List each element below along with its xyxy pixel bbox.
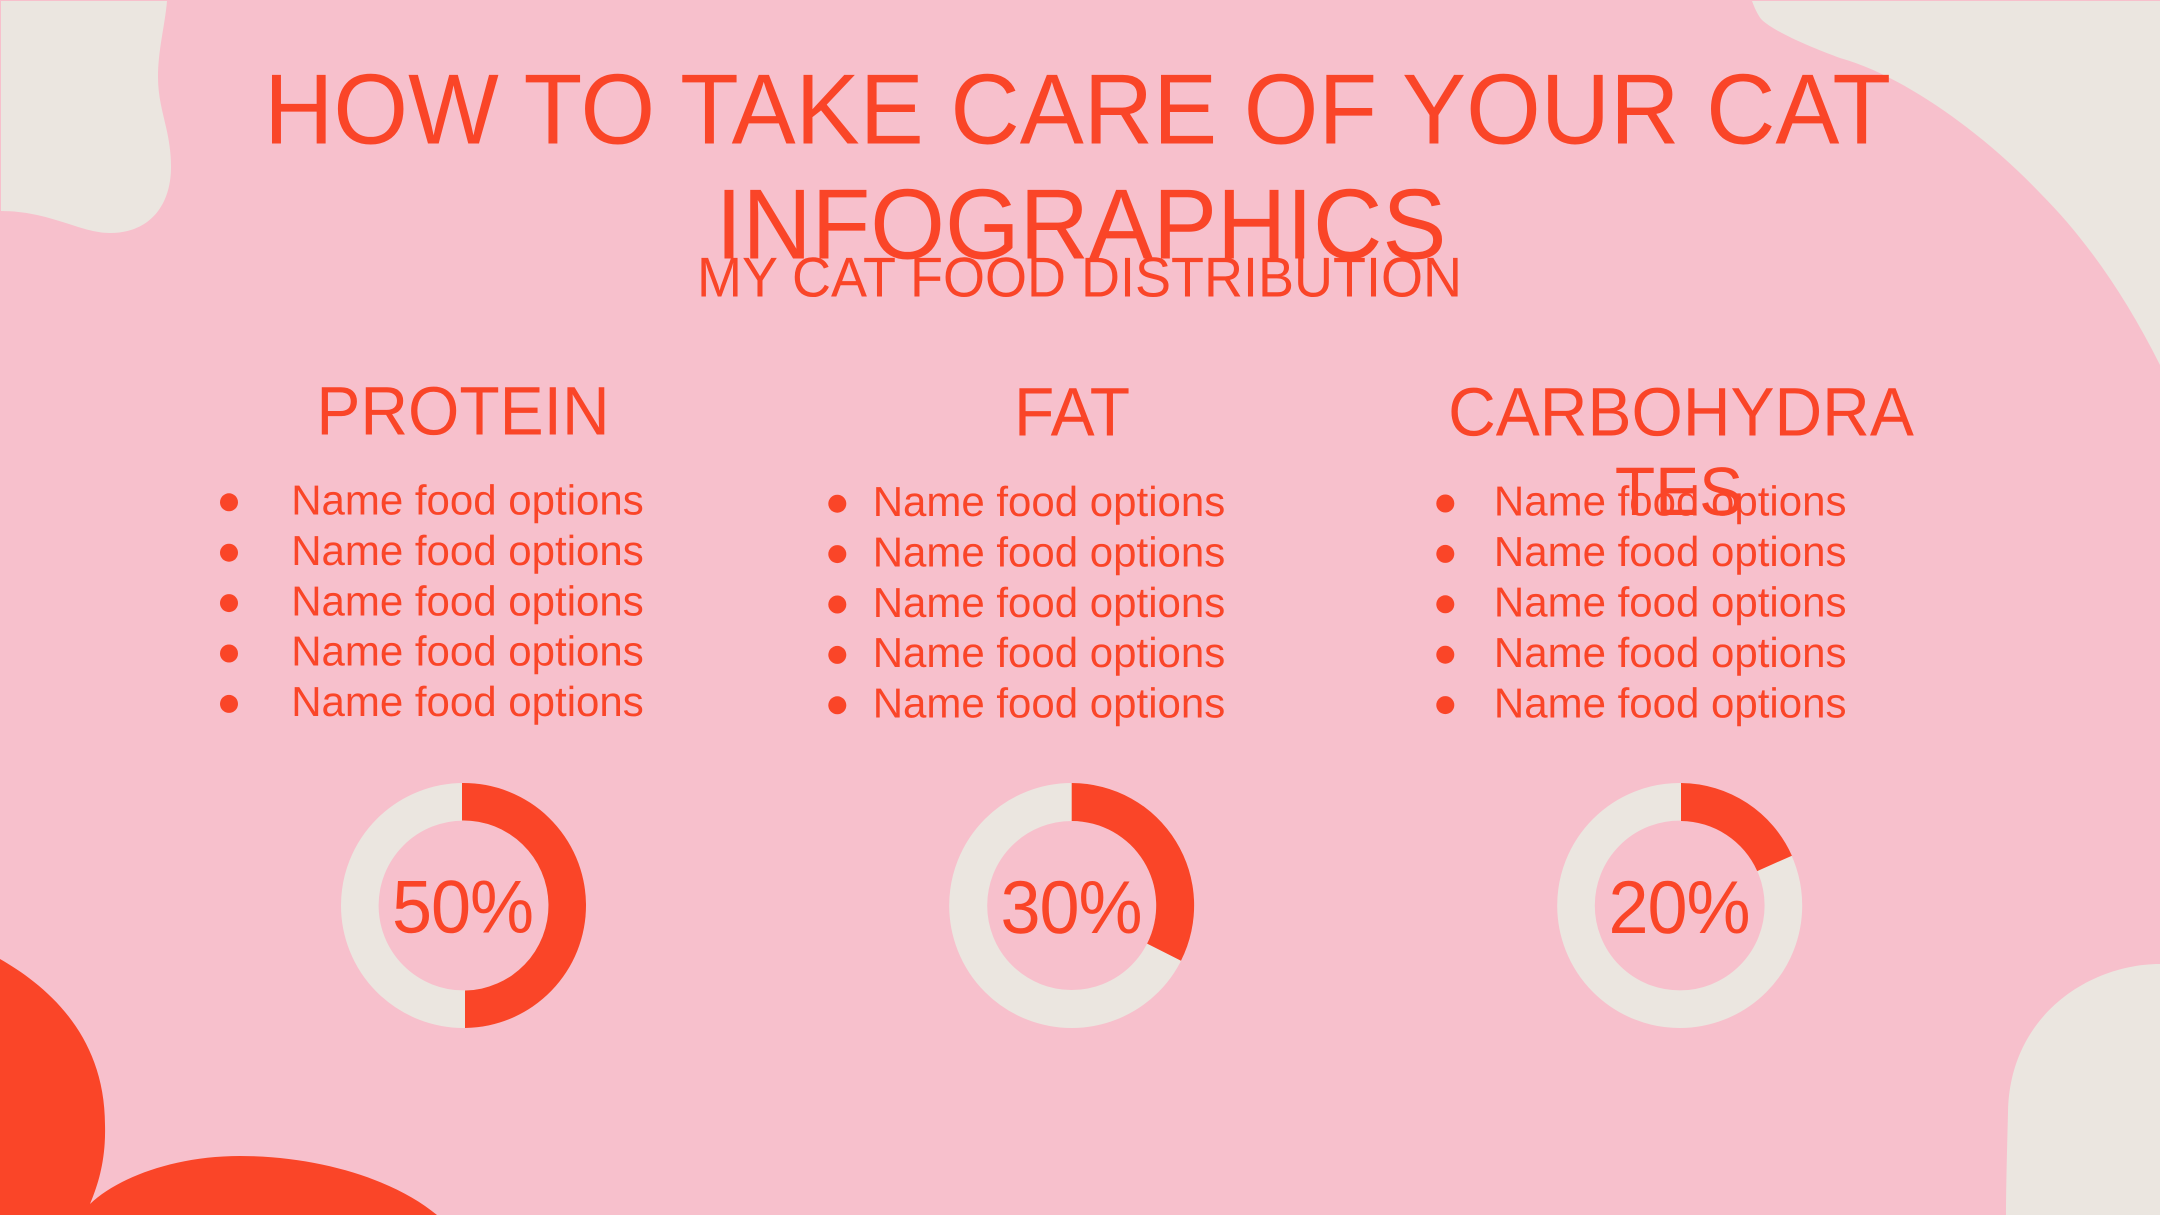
heading: fat: FAT: [1014, 373, 1130, 450]
food list: protein: [220, 476, 644, 725]
food list: carbohydrates: Name food options: [1494, 528, 1846, 575]
donut chart: 50%: 50%: [392, 866, 533, 949]
decorative blob: top left: [1, 1, 171, 233]
food list: carbohydrates: Name food options: [1494, 629, 1846, 676]
food list: fat: Name food options: [873, 528, 1225, 575]
food list: protein: Name food options: [291, 527, 644, 574]
decorative blob: bottom right: [2006, 964, 2160, 1215]
donut chart: 20%: [1576, 783, 1792, 1009]
food list: fat: Name food options: [873, 629, 1225, 676]
heading: carbohydrates: [1448, 373, 1914, 530]
heading: carbohydrates: TES: [1615, 453, 1743, 530]
food list: fat: Name food options: [873, 478, 1225, 525]
panel: protein: [220, 372, 644, 1028]
title: HOW TO TAKE CARE OF YOUR CAT: [264, 54, 1891, 165]
donut chart: 30%: [968, 783, 1194, 1009]
decorative petals: bottom left: [0, 959, 437, 1215]
food list: carbohydrates: Name food options: [1494, 578, 1846, 626]
heading: carbohydrates: CARBOHYDRA: [1448, 373, 1914, 450]
food list: fat: Name food options: [873, 579, 1225, 626]
title: INFOGRAPHICS: [716, 169, 1446, 281]
subtitle: MY CAT FOOD DISTRIBUTION: [697, 246, 1462, 309]
panel: carbohydrates: [1436, 373, 1914, 1009]
food list: fat: Name food options: [873, 680, 1225, 727]
food list: fat: [828, 478, 1225, 727]
donut chart: 50%: [360, 783, 586, 1028]
food list: carbohydrates: Name food options: [1494, 478, 1846, 525]
food list: protein: Name food options: [291, 476, 644, 524]
decorative blob: top right: [1752, 1, 2160, 365]
donut chart: 20%: 20%: [1608, 866, 1750, 950]
donut chart: 30%: 30%: [1000, 866, 1142, 950]
food list: protein: Name food options: [291, 678, 644, 725]
food list: protein: Name food options: [291, 577, 644, 624]
food list: carbohydrates: [1436, 478, 1846, 726]
panel: fat: [828, 373, 1225, 1009]
heading: protein: PROTEIN: [316, 372, 610, 449]
food list: carbohydrates: Name food options: [1494, 679, 1846, 726]
food list: protein: Name food options: [291, 628, 644, 675]
title: [264, 54, 1891, 281]
